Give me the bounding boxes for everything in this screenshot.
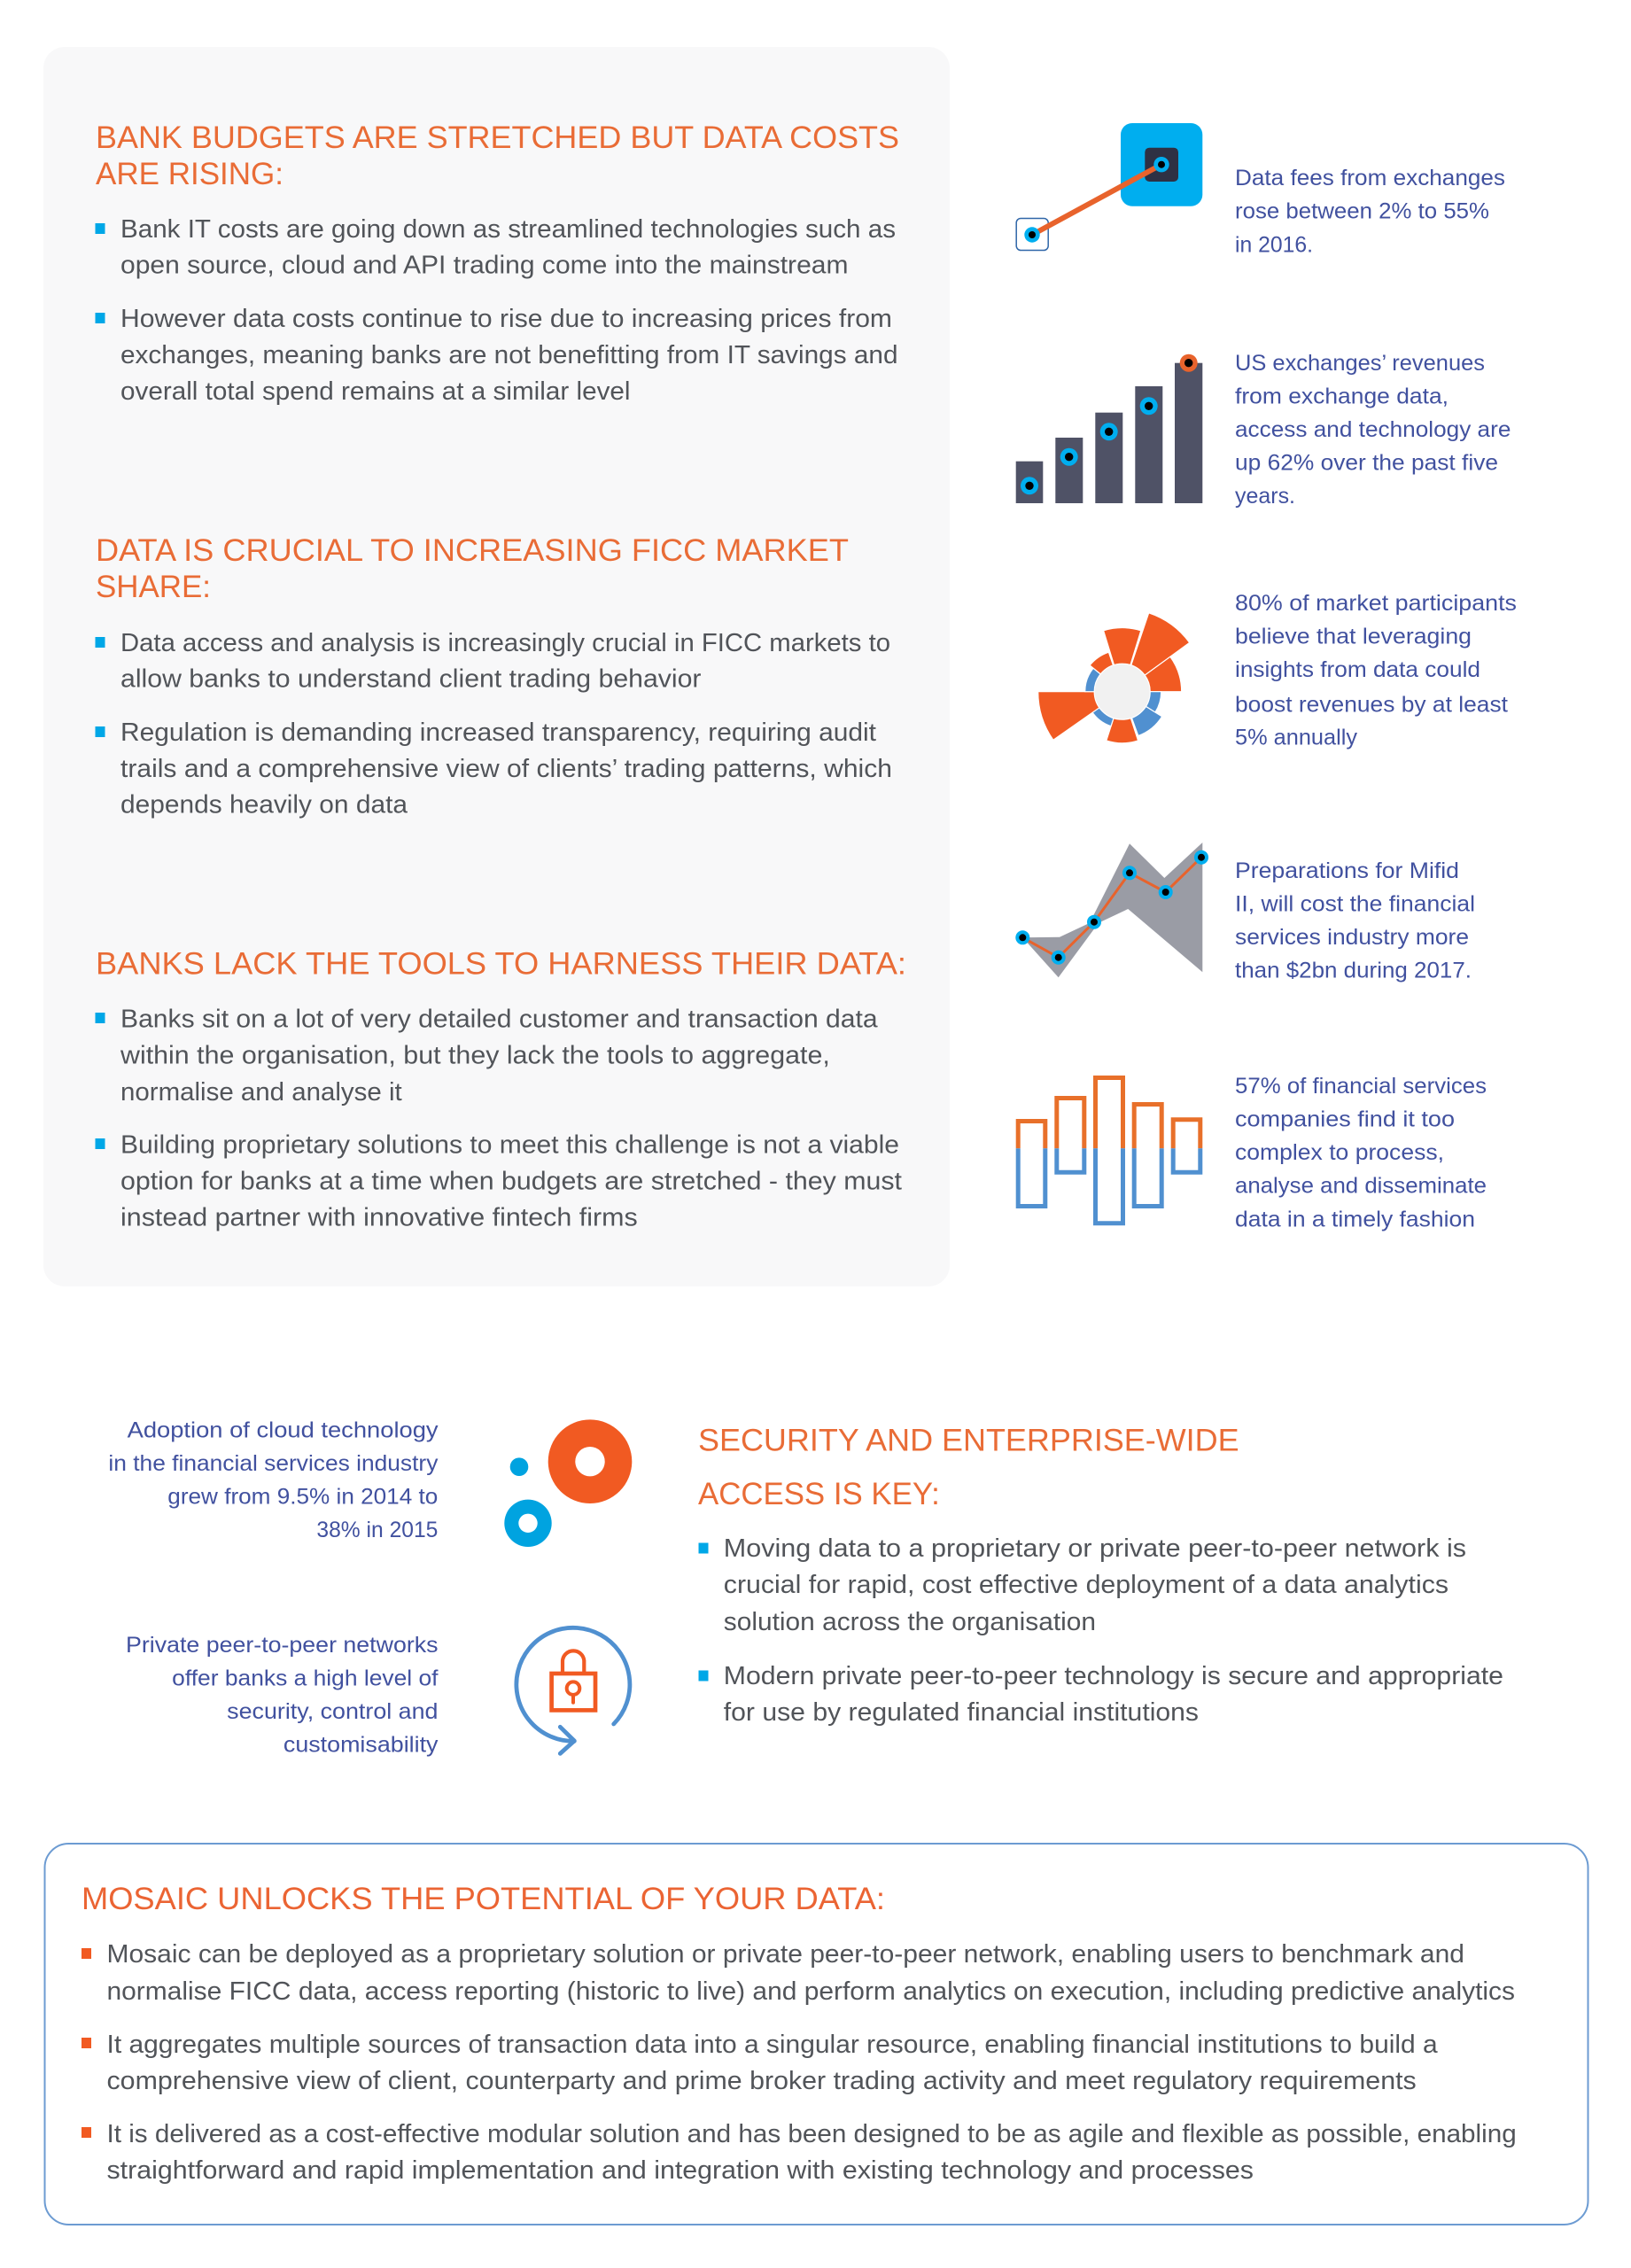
- heading: bank budgets: ARE RISING:: [96, 157, 283, 191]
- text: financial services stat: complex to process,: [1235, 1140, 1444, 1165]
- bullet list: Mosaic benefits: It is delivered as a cost-effective modular solution and has been designed to be as agile and flexible as possible, enabling: [106, 2120, 1517, 2148]
- text: market participants stat: insights from data could: [1235, 657, 1480, 682]
- bullet list: bank budgets: However data costs continue to rise due to increasing prices from: [120, 305, 892, 333]
- bullet list: security and access: Modern private peer-to-peer technology is secure and appropriate: [724, 1662, 1503, 1690]
- icon: connected squares: [1016, 123, 1202, 250]
- bullet list: data is crucial: allow banks to understand client trading behavior: [120, 664, 702, 693]
- bullet list: data is crucial: Data access and analysis is increasingly crucial in FICC markets to: [120, 629, 890, 657]
- heading: bank budgets: [96, 120, 899, 191]
- text: US exchanges stat: up 62% over the past five: [1235, 451, 1498, 476]
- bullet list: banks lack the tools: option for banks at a time when budgets are stretched - they must: [120, 1168, 902, 1196]
- bullet list: security and access: Moving data to a proprietary or private peer-to-peer network is: [724, 1534, 1466, 1563]
- bullet list: security and access: solution across the organisation: [724, 1608, 1096, 1636]
- text: peer-to-peer stat: customisability: [283, 1732, 439, 1757]
- text: US exchanges stat: US exchanges’ revenues: [1235, 351, 1485, 376]
- heading: security and access: SECURITY AND ENTERPRISE-WIDE: [698, 1423, 1239, 1457]
- bullet list: bank budgets: [96, 215, 898, 406]
- text: US exchanges stat: years.: [1235, 484, 1295, 509]
- text: data fees stat: rose between 2% to 55%: [1235, 199, 1489, 224]
- heading: banks lack the tools: BANKS LACK THE TOOLS TO HARNESS THEIR DATA:: [96, 946, 906, 982]
- bullet list: Mosaic benefits: comprehensive view of client, counterparty and prime broker trading activity and meet regulatory requirements: [106, 2067, 1417, 2095]
- text: peer-to-peer stat: offer banks a high level of: [172, 1666, 439, 1690]
- text: peer-to-peer stat: Private peer-to-peer networks: [126, 1633, 438, 1658]
- bullet list: bank budgets: open source, cloud and API trading come into the mainstream: [120, 252, 849, 280]
- panel: Mosaic summary: [44, 1844, 1588, 2225]
- text: financial services stat: [1235, 1074, 1487, 1231]
- bullet list: Mosaic benefits: normalise FICC data, access reporting (historic to live) and perform analytics on execution, including predictive analytics: [106, 1977, 1515, 2006]
- text: peer-to-peer stat: security, control and: [227, 1699, 438, 1724]
- text: cloud adoption stat: [108, 1418, 439, 1542]
- text: market participants stat: 80% of market participants: [1235, 591, 1517, 616]
- text: Mifid II stat: Preparations for Mifid: [1235, 858, 1459, 883]
- text: financial services stat: 57% of financial services: [1235, 1074, 1487, 1099]
- bullet list: security and access: [698, 1534, 1503, 1727]
- bullet list: banks lack the tools: [96, 1005, 902, 1231]
- heading: data is crucial: DATA IS CRUCIAL TO INCREASING FICC MARKET: [96, 533, 849, 568]
- bullet list: data is crucial: depends heavily on data: [120, 790, 408, 819]
- bullet list: banks lack the tools: within the organisation, but they lack the tools to aggregate,: [120, 1042, 830, 1070]
- icon: area and line chart: [1015, 843, 1208, 977]
- bullet list: bank budgets: Bank IT costs are going down as streamlined technologies such as: [120, 215, 896, 244]
- text: peer-to-peer stat: [126, 1633, 439, 1758]
- text: Mifid II stat: II, will cost the financial: [1235, 892, 1475, 917]
- text: financial services stat: data in a timely fashion: [1235, 1207, 1475, 1231]
- bullet list: Mosaic benefits: [82, 1940, 1517, 2185]
- text: cloud adoption stat: 38% in 2015: [316, 1518, 438, 1542]
- heading: security and access: [698, 1423, 1239, 1511]
- bullet list: data is crucial: Regulation is demanding increased transparency, requiring audit: [120, 718, 876, 747]
- text: Mifid II stat: services industry more: [1235, 925, 1469, 950]
- heading: bank budgets: BANK BUDGETS ARE STRETCHED BUT DATA COSTS: [96, 120, 899, 155]
- bullet list: banks lack the tools: Building proprietary solutions to meet this challenge is not a viable: [120, 1130, 899, 1159]
- text: US exchanges stat: [1235, 351, 1511, 509]
- bullet list: data is crucial: [96, 629, 892, 819]
- bullet list: Mosaic benefits: straightforward and rapid implementation and integration with existing technology and processes: [106, 2156, 1254, 2185]
- text: Mifid II stat: [1235, 858, 1475, 983]
- icon: outlined split bars: [1018, 1077, 1200, 1223]
- heading: data is crucial: [96, 533, 849, 604]
- icon: radial wedge chart: [1038, 613, 1190, 743]
- panel: bank challenges: [43, 47, 950, 1286]
- text: data fees stat: Data fees from exchanges: [1235, 166, 1505, 190]
- bullet list: banks lack the tools: instead partner with innovative fintech firms: [120, 1203, 638, 1231]
- text: cloud adoption stat: in the financial services industry: [108, 1451, 439, 1476]
- bullet list: Mosaic benefits: Mosaic can be deployed as a proprietary solution or private peer-to-peer network, enabling users to benchmark and: [106, 1940, 1464, 1969]
- text: US exchanges stat: from exchange data,: [1235, 384, 1448, 409]
- icon: rising bar chart: [1016, 354, 1202, 503]
- text: market participants stat: believe that leveraging: [1235, 625, 1472, 649]
- heading: Mosaic unlocks: MOSAIC UNLOCKS THE POTENTIAL OF YOUR DATA:: [82, 1882, 885, 1916]
- text: market participants stat: [1235, 591, 1517, 750]
- bullet list: data is crucial: trails and a comprehensive view of clients’ trading patterns, which: [120, 755, 892, 783]
- heading: security and access: ACCESS IS KEY:: [698, 1477, 940, 1511]
- bullet list: banks lack the tools: Banks sit on a lot of very detailed customer and transaction data: [120, 1005, 878, 1033]
- heading: data is crucial: SHARE:: [96, 570, 211, 604]
- text: financial services stat: analyse and disseminate: [1235, 1174, 1487, 1199]
- text: data fees stat: in 2016.: [1235, 232, 1313, 257]
- bullet list: banks lack the tools: normalise and analyse it: [120, 1078, 402, 1107]
- icon: cloud circles: [504, 1419, 632, 1547]
- bullet list: Mosaic benefits: It aggregates multiple sources of transaction data into a singular resource, enabling financial institutions to build a: [106, 2031, 1438, 2059]
- bullet list: security and access: for use by regulated financial institutions: [724, 1698, 1199, 1727]
- icon: padlock with circular arrow: [516, 1627, 630, 1753]
- text: market participants stat: boost revenues by at least: [1235, 692, 1508, 717]
- text: US exchanges stat: access and technology are: [1235, 417, 1511, 442]
- bullet list: security and access: crucial for rapid, cost effective deployment of a data analytics: [724, 1571, 1448, 1599]
- text: financial services stat: companies find it too: [1235, 1107, 1455, 1132]
- text: data fees stat: [1235, 166, 1505, 257]
- bullet list: bank budgets: overall total spend remains at a similar level: [120, 377, 631, 406]
- text: cloud adoption stat: grew from 9.5% in 2014 to: [167, 1485, 438, 1510]
- text: cloud adoption stat: Adoption of cloud technology: [128, 1418, 439, 1443]
- bullet list: bank budgets: exchanges, meaning banks are not benefitting from IT savings and: [120, 341, 898, 369]
- text: market participants stat: 5% annually: [1235, 726, 1357, 750]
- text: Mifid II stat: than $2bn during 2017.: [1235, 959, 1472, 983]
